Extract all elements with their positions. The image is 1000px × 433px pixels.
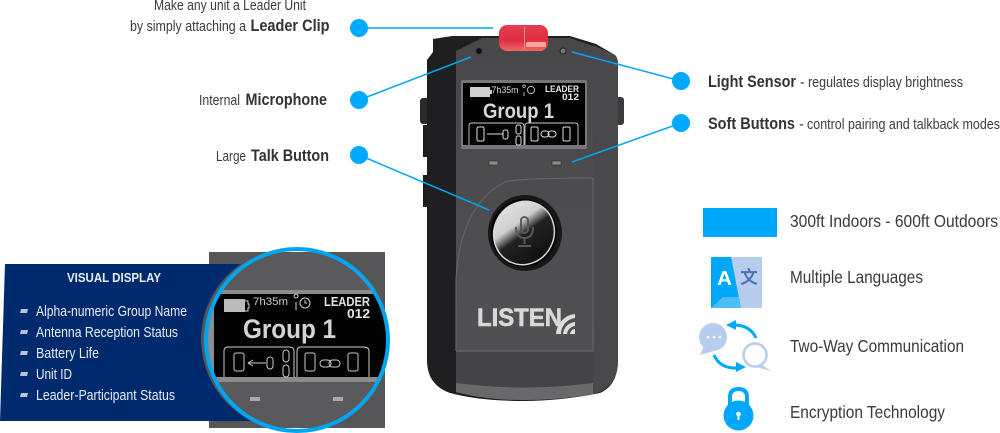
callout: microphone: Internal — [199, 93, 240, 109]
body — [427, 36, 618, 401]
callout: soft buttons: - — [799, 117, 804, 133]
callout: light sensor — [572, 52, 963, 91]
feature: encryption: Encryption Technology — [790, 402, 945, 422]
bottom strip — [456, 352, 593, 388]
enlarged display — [205, 290, 389, 401]
enlarged display: 012 — [347, 307, 370, 321]
callout: light sensor: regulates display brightness — [808, 75, 963, 91]
icon: chat bubbles — [699, 320, 771, 372]
callout: microphone: Microphone — [246, 90, 327, 109]
display: 012 — [562, 92, 579, 103]
icon: leader clip — [499, 25, 548, 51]
callout: talk button: Large — [216, 149, 246, 165]
feature list: Antenna Reception Status — [36, 325, 178, 341]
callout: leader clip: by simply attaching a — [130, 19, 247, 35]
heading: VISUAL DISPLAY — [67, 270, 161, 285]
callout: leader clip — [130, 0, 493, 37]
icon: translate — [711, 257, 762, 308]
battery icon — [224, 299, 249, 312]
icon: translate: 文 — [740, 267, 758, 287]
feature list: Unit ID — [36, 367, 72, 383]
display: LEADER — [545, 84, 579, 95]
microphone hole — [476, 48, 482, 54]
feature: range — [703, 208, 998, 237]
LISTEN logo: LISTEN — [477, 304, 562, 332]
callout: light sensor: Light Sensor — [708, 72, 796, 91]
icon: microphone — [516, 217, 533, 246]
enlarged display: LEADER — [324, 295, 370, 309]
icon: lock — [724, 389, 754, 430]
talk button — [483, 191, 565, 275]
callout: soft buttons: Soft Buttons — [708, 114, 795, 133]
soft button marks — [489, 161, 498, 165]
right band — [593, 45, 618, 394]
callout: talk button: Talk Button — [251, 146, 329, 165]
icon: range bar — [703, 208, 777, 237]
enlarged display: 7h35m — [253, 296, 288, 308]
feature: two-way — [699, 320, 964, 372]
magnifier ring — [206, 249, 388, 431]
light sensor — [560, 48, 566, 54]
callout: talk button — [216, 146, 489, 210]
device: Listen unit — [420, 25, 624, 401]
feature list — [20, 304, 187, 404]
callout: microphone — [199, 57, 471, 109]
soft key icons — [224, 347, 369, 377]
feature list: Alpha-numeric Group Name — [36, 304, 187, 320]
feature: encryption — [724, 389, 945, 430]
feature: languages — [711, 257, 923, 308]
feature: languages: Multiple Languages — [790, 267, 923, 287]
feature list: Battery Life — [36, 346, 99, 362]
enlarged display: Group 1 — [243, 314, 336, 344]
front plate — [456, 38, 593, 400]
feature list: Leader-Participant Status — [36, 388, 175, 404]
display: Group 1 — [483, 100, 554, 123]
panel outline — [456, 178, 593, 351]
display: 7h35m — [492, 85, 518, 95]
panel: visual display — [0, 264, 300, 421]
feature: two-way: Two-Way Communication — [790, 336, 964, 356]
callout: soft buttons — [572, 114, 1000, 162]
display — [461, 80, 587, 149]
icon: translate: A — [717, 268, 732, 290]
callout: leader clip: Leader Clip — [250, 16, 330, 35]
callout: light sensor: - — [800, 75, 805, 91]
photo: enlarged display backdrop — [201, 252, 385, 428]
side buttons — [420, 97, 624, 207]
